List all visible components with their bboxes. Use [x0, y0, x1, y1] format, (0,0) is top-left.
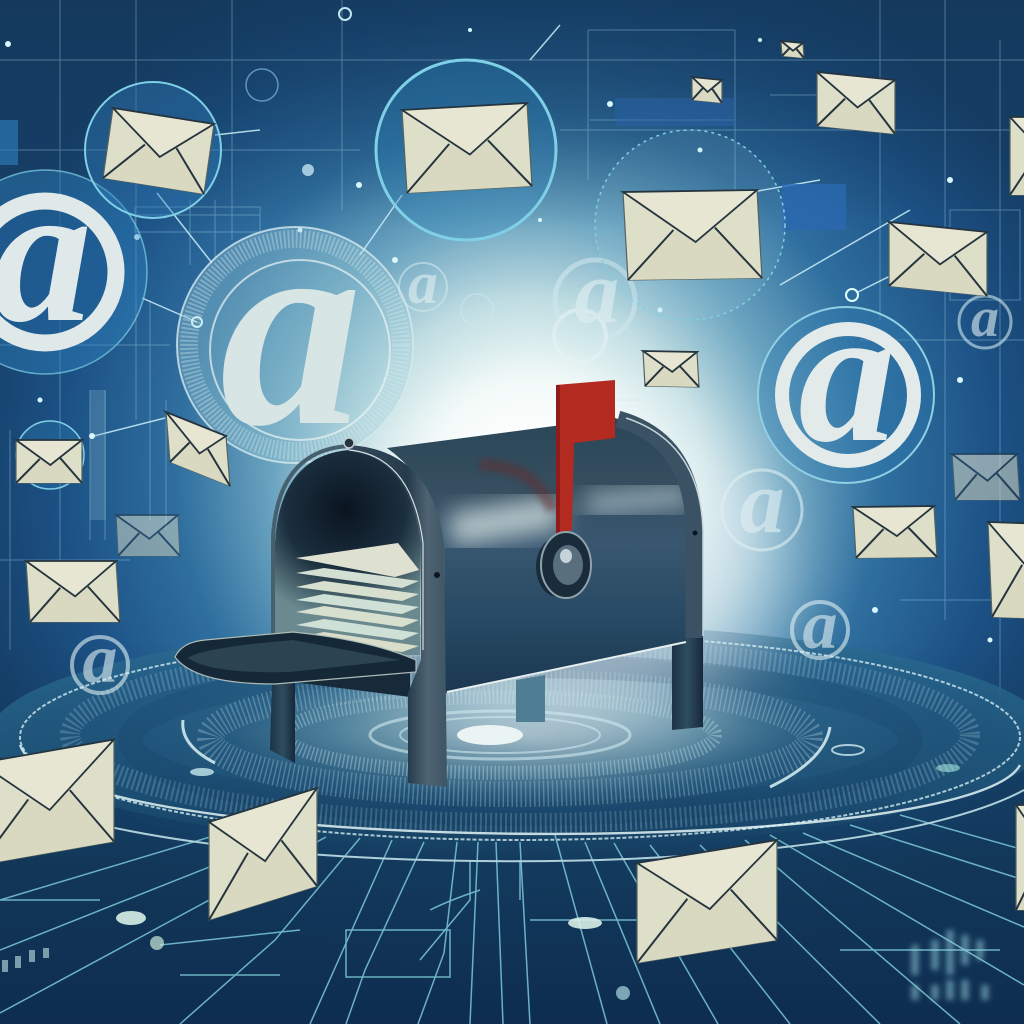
background tech grid lines [0, 0, 1024, 700]
envelope: bottom centre right [637, 840, 777, 963]
top shading [0, 0, 1024, 230]
envelope: upper left [103, 108, 214, 194]
envelope: bottom left large [0, 740, 114, 865]
rim inner highlight [349, 450, 423, 650]
at sign: left [0, 143, 147, 374]
envelope: small left [16, 440, 82, 483]
envelope: tiny top [692, 77, 722, 103]
envelope: tilted left [166, 412, 230, 486]
envelope: mid right [853, 506, 937, 558]
rim left edge [273, 446, 349, 650]
mailbox [175, 380, 703, 787]
at sign: centre large [177, 169, 413, 485]
envelope: bottom centre left [209, 788, 317, 920]
at sign: right [758, 267, 934, 483]
envelope: right edge middle [988, 522, 1024, 620]
central light bloom [340, 390, 780, 730]
faded at signs: a [971, 287, 999, 349]
front rim and right post [349, 445, 447, 787]
body bottom edge [447, 642, 686, 692]
envelope: right [889, 222, 987, 296]
door opening [275, 450, 421, 655]
under-door strut [293, 660, 410, 697]
lower dark ground [0, 640, 1024, 1024]
envelope: right edge lower [1016, 805, 1024, 910]
envelope: top right [817, 72, 895, 134]
mailbox body [387, 418, 686, 693]
faded at signs [72, 243, 1011, 698]
envelope: small centre [643, 351, 699, 387]
faded at signs: a [740, 453, 784, 552]
faded at signs: a [408, 250, 438, 316]
floor disc [0, 623, 1024, 847]
envelope: centre right [623, 190, 762, 280]
envelope: faded left [116, 515, 180, 556]
bottom glints and data bars [5, 911, 985, 1000]
connector lines [90, 25, 910, 437]
faded at signs: a [82, 621, 118, 698]
hinge and screws [344, 438, 698, 578]
body highlight and flag reflection [450, 465, 690, 530]
tray inner [188, 640, 400, 672]
door tray [175, 632, 416, 684]
at sign: right: a [798, 267, 896, 483]
flag [556, 380, 615, 534]
rear rim [618, 419, 694, 638]
stacked letters [296, 543, 419, 652]
envelope: mid left [26, 561, 120, 622]
envelope: right edge upper [1010, 117, 1024, 195]
envelope: faded right [952, 454, 1020, 500]
blue data panels [0, 98, 846, 520]
at sign: centre large: a [220, 169, 362, 485]
glowing data particles [5, 8, 992, 642]
faded at signs: a [802, 587, 838, 664]
envelope rings [16, 60, 785, 489]
concentric floor rings [20, 634, 1020, 840]
faded at signs: a [574, 243, 620, 342]
rear and left legs [270, 635, 703, 763]
envelope: tiny top right [781, 41, 804, 58]
envelope: upper centre [402, 103, 532, 193]
rim highlight [626, 418, 703, 636]
circuit lines on the ground [0, 745, 1024, 1024]
flag knob [536, 532, 591, 598]
